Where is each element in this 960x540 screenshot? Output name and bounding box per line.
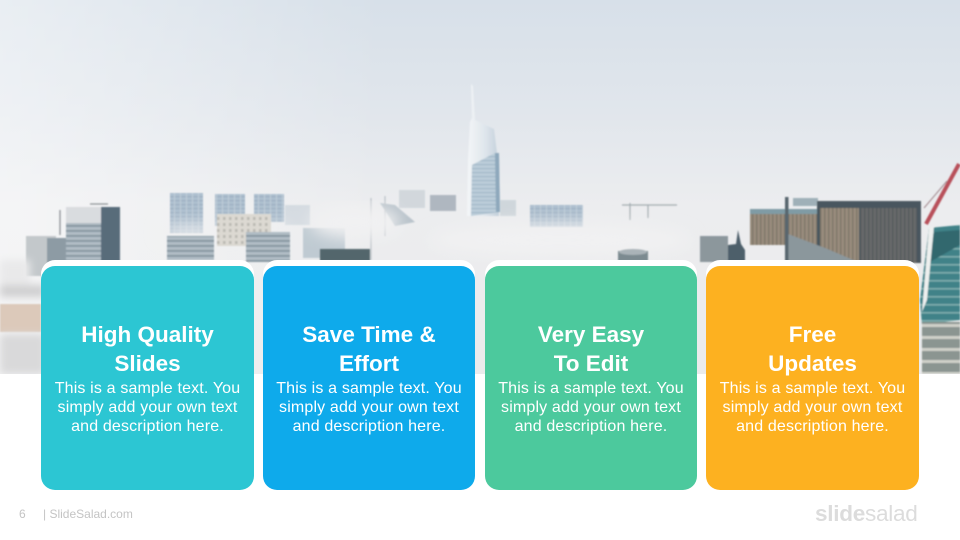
panel: save time and effort: simply add your own text bbox=[279, 399, 459, 416]
panel: high quality slides: simply add your own text bbox=[58, 399, 237, 416]
panel: save time and effort: This is a sample text. You bbox=[276, 380, 462, 397]
fog: lower layer bbox=[0, 260, 45, 374]
panel: very easy to edit: and description here. bbox=[515, 418, 667, 435]
panel: save time and effort: and description here. bbox=[293, 418, 445, 435]
white card backing 1 bbox=[41, 260, 254, 320]
panel: very easy to edit bbox=[485, 266, 697, 490]
fog: mid layer bbox=[160, 206, 690, 257]
page number: 6 bbox=[19, 507, 26, 521]
far buildings bbox=[170, 190, 677, 260]
logo wordmark: slidesalad bbox=[815, 501, 918, 526]
panel: high quality slides: High Quality bbox=[81, 322, 214, 347]
panel: free updates: This is a sample text. You bbox=[720, 380, 905, 397]
panel: very easy to edit: To Edit bbox=[554, 351, 628, 376]
white card backing 3 bbox=[485, 260, 697, 320]
panel: free updates: Free bbox=[789, 322, 836, 347]
panel: save time and effort bbox=[263, 266, 475, 490]
panel: free updates bbox=[706, 266, 919, 490]
panel: very easy to edit: Very Easy bbox=[538, 322, 644, 347]
near buildings bbox=[0, 164, 960, 374]
panel: save time and effort: Effort bbox=[339, 351, 399, 376]
panel: very easy to edit: This is a sample text. You bbox=[498, 380, 684, 397]
footer site name: | SlideSalad.com bbox=[43, 507, 133, 521]
panel: high quality slides: Slides bbox=[114, 351, 181, 376]
panel: free updates: Updates bbox=[768, 351, 857, 376]
panel: free updates: simply add your own text bbox=[723, 399, 902, 416]
photo: city skyline in fog bbox=[0, 0, 960, 374]
white card backing 2 bbox=[263, 260, 475, 320]
panel: high quality slides: This is a sample text. You bbox=[55, 380, 240, 397]
panel: free updates: and description here. bbox=[736, 418, 889, 435]
panel: very easy to edit: simply add your own text bbox=[501, 399, 681, 416]
central tower bbox=[467, 84, 500, 216]
panel: high quality slides bbox=[41, 266, 254, 490]
panel: save time and effort: Save Time & bbox=[302, 322, 436, 347]
panel: high quality slides: and description here. bbox=[71, 418, 224, 435]
white card backing 4 bbox=[706, 260, 919, 320]
